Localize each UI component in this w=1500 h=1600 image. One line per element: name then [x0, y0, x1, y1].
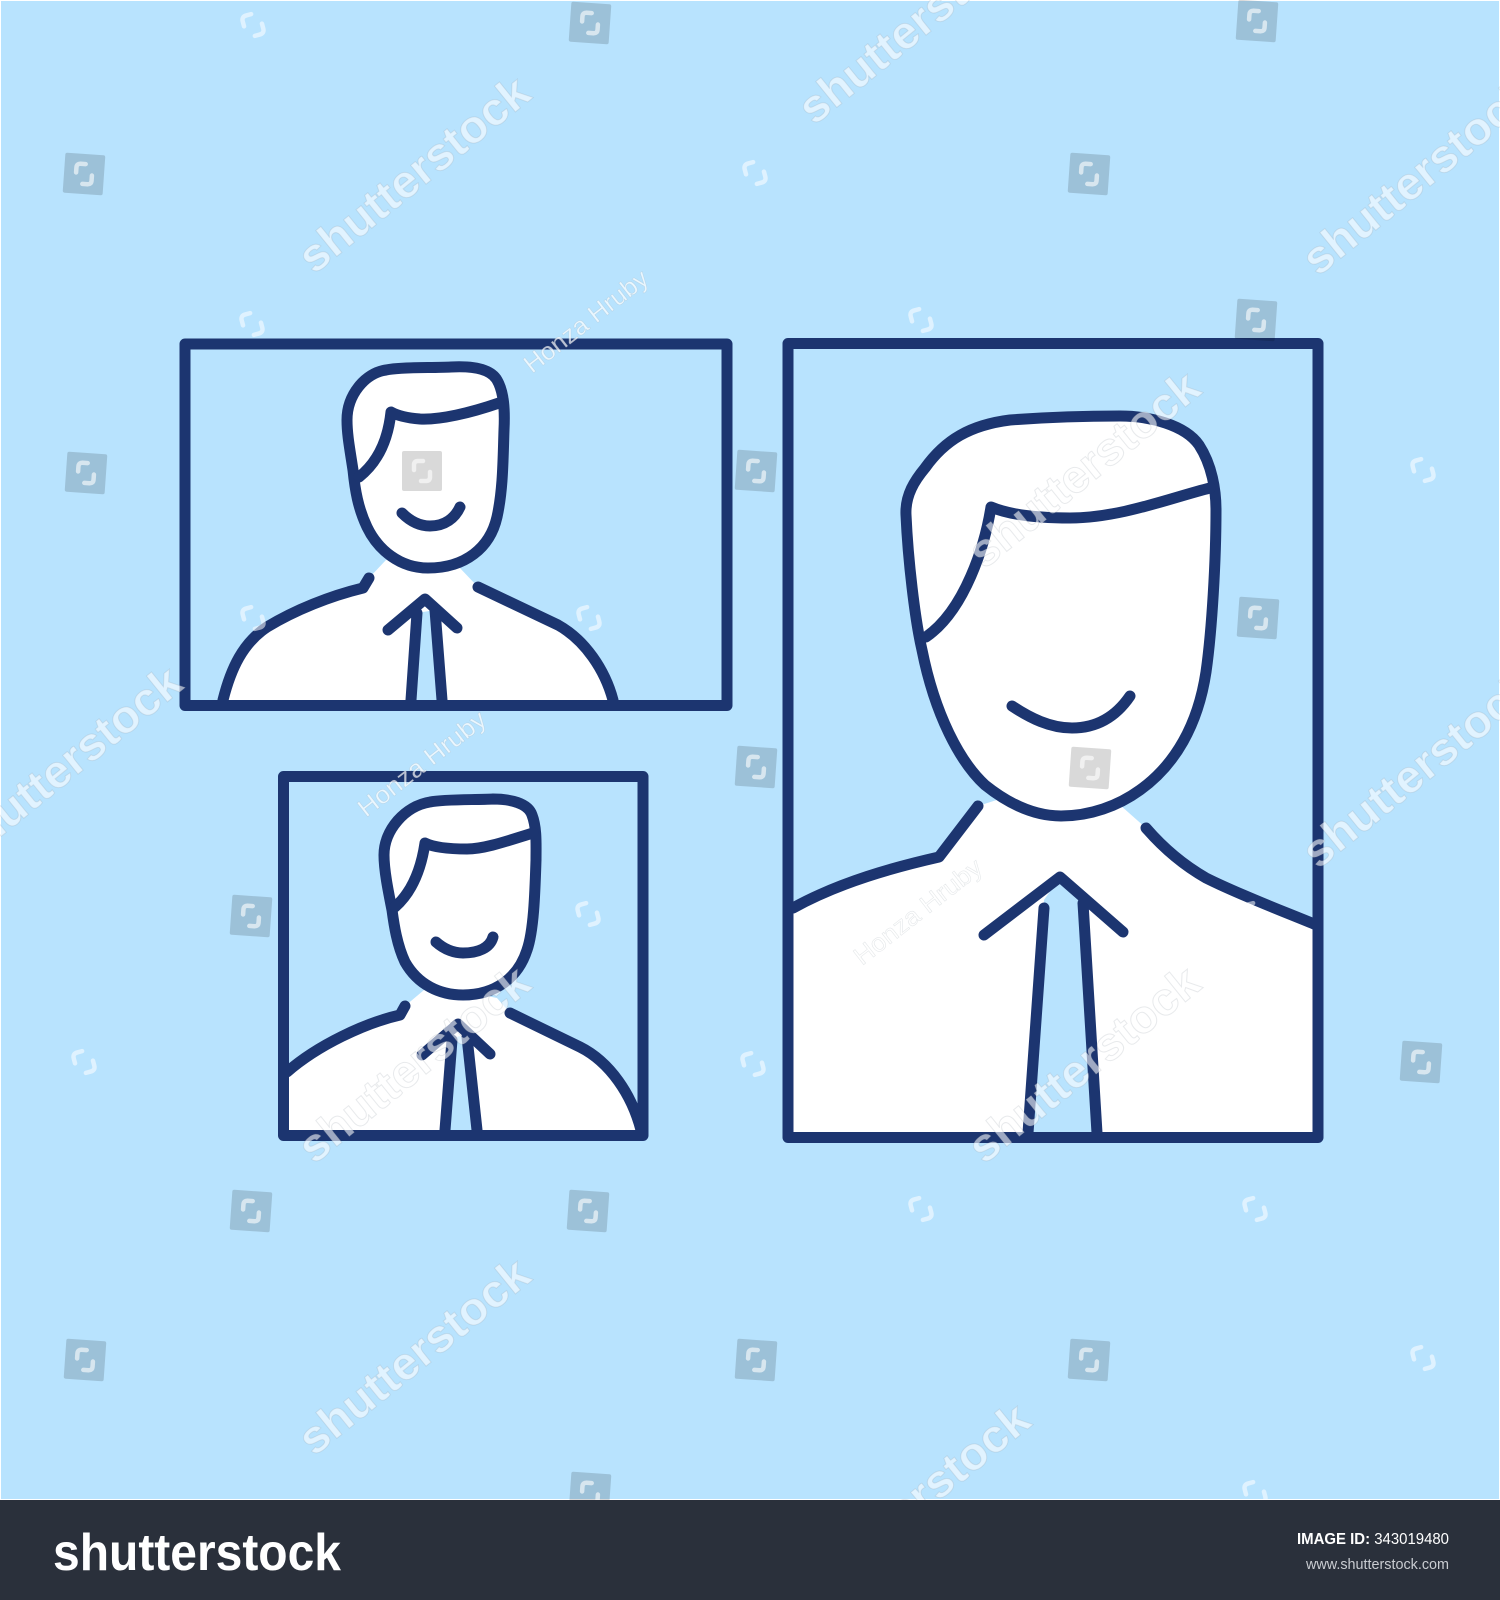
- person body: [223, 560, 613, 702]
- footer bar: [0, 1500, 1500, 1600]
- watermark author name: Honza Hruby: [352, 705, 492, 823]
- panel: medium wide portrait frame: [185, 344, 727, 706]
- tie fill: [445, 1036, 477, 1132]
- watermark author name: [352, 264, 988, 971]
- watermark shutterstock text: shutterstock: [288, 65, 540, 283]
- watermark shutterstock text: shutterstock: [958, 360, 1210, 578]
- hair line: [395, 833, 533, 907]
- watermark author name: Honza Hruby: [518, 264, 654, 379]
- shoulders: [287, 1006, 641, 1130]
- watermark shutterstock text: shutterstock: [288, 955, 540, 1173]
- collar and tie: [388, 599, 457, 700]
- tie fill: [1028, 877, 1097, 1133]
- hair line: [359, 403, 499, 477]
- frame: [185, 344, 727, 706]
- head: [347, 367, 504, 568]
- panel: small square portrait frame: [284, 776, 643, 1136]
- person body: [287, 985, 641, 1132]
- footer logo: shutterstock: [53, 1524, 341, 1582]
- smile: [1012, 696, 1130, 728]
- collar and tie: [422, 1024, 490, 1130]
- person body: [793, 797, 1314, 1133]
- watermark shutterstock text: shutterstock: [288, 1247, 540, 1465]
- smile: [402, 507, 460, 526]
- watermark shutterstock text: shutterstock: [958, 955, 1210, 1173]
- watermark author name: Honza Hruby: [848, 853, 988, 971]
- panel: large tall portrait frame: [788, 344, 1318, 1138]
- hair line: [926, 488, 1210, 637]
- image id: IMAGE ID: 343019480: [1297, 1531, 1449, 1548]
- head: [384, 799, 536, 995]
- shoulders: [793, 806, 1314, 924]
- shoulders: [223, 578, 613, 700]
- website: www.shutterstock.com: [1305, 1556, 1449, 1573]
- collar and tie: [984, 877, 1123, 1133]
- tie fill: [411, 610, 442, 702]
- head: [906, 416, 1216, 816]
- frame: [788, 344, 1318, 1138]
- smile: [436, 937, 493, 953]
- frame: [284, 776, 643, 1136]
